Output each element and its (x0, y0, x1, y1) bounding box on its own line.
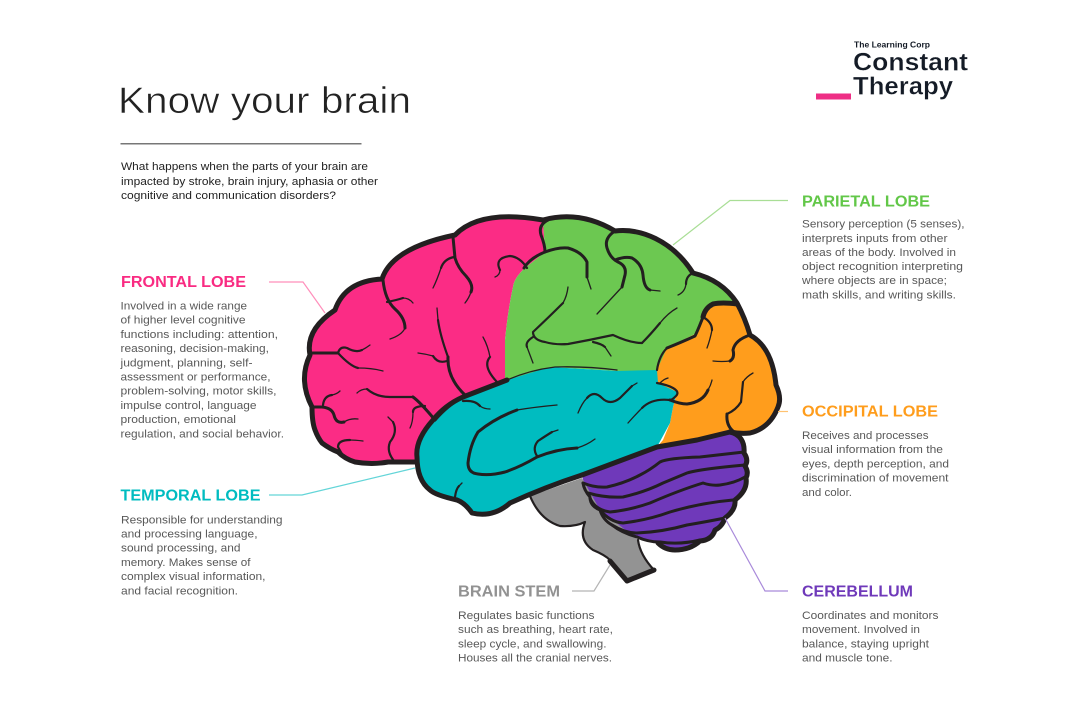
panel: parietal lobe: interprets inputs from other (802, 233, 948, 245)
panel: temporal lobe: memory. Makes sense of (121, 557, 251, 569)
brain outer outline (304, 217, 780, 464)
leader: parietal lobe (673, 200, 788, 245)
panel: brain stem: sleep cycle, and swallowing. (458, 638, 606, 650)
panel: cerebellum: movement. Involved in (802, 624, 920, 636)
panel: occipital lobe: visual information from the (802, 444, 943, 456)
panel: frontal lobe: production, emotional (120, 414, 236, 426)
panel: cerebellum: CEREBELLUM (802, 584, 913, 601)
cerebellum folds (583, 432, 747, 550)
brain illustration (304, 217, 780, 581)
panel: temporal lobe: Responsible for understanding (121, 514, 282, 526)
temporal lobe outline and folds (417, 367, 730, 514)
panel: brain stem: Regulates basic functions (458, 610, 595, 622)
panel: frontal lobe: FRONTAL LOBE (121, 274, 246, 291)
panel: brain stem: Houses all the cranial nerves. (458, 653, 612, 665)
panel: frontal lobe (119, 274, 284, 440)
panel: parietal lobe: PARIETAL LOBE (802, 193, 930, 210)
panel: frontal lobe: assessment or performance, (120, 372, 270, 384)
panel: temporal lobe: and facial recognition. (121, 585, 238, 597)
occipital lobe outline and folds (657, 303, 753, 431)
brain stem outline (530, 496, 654, 581)
panel: parietal lobe: object recognition interpreting (802, 261, 963, 273)
panel: frontal lobe: impulse control, language (120, 400, 256, 412)
panel: occipital lobe: eyes, depth perception, and (802, 458, 949, 470)
panel: temporal lobe (120, 487, 282, 597)
panel: occipital lobe (802, 403, 949, 499)
panel: parietal lobe: where objects are in space; (801, 275, 947, 287)
occipital lobe fill (657, 303, 780, 447)
panel: parietal lobe: areas of the body. Involved in (802, 247, 956, 259)
panel: frontal lobe: regulation, and social behavior. (120, 428, 284, 440)
panel: parietal lobe: math skills, and writing skills. (802, 289, 956, 301)
panel: occipital lobe: Receives and processes (802, 430, 929, 442)
panel: temporal lobe: TEMPORAL LOBE (120, 487, 260, 504)
leader: temporal lobe (269, 468, 415, 495)
panel: frontal lobe: problem-solving, motor skills, (120, 386, 276, 398)
panel: brain stem: BRAIN STEM (458, 584, 560, 601)
logo: Constant Therapy: Therapy (853, 72, 953, 100)
panel: occipital lobe: and color. (802, 487, 852, 499)
leader: occipital lobe (778, 410, 788, 412)
intro text: impacted by stroke, brain injury, aphasia or other (121, 176, 378, 188)
panel: occipital lobe: OCCIPITAL LOBE (802, 403, 938, 420)
panel: cerebellum: balance, staying upright (802, 638, 929, 650)
panel: temporal lobe: sound processing, and (121, 543, 240, 555)
frontal lobe fill (304, 217, 545, 462)
panel: frontal lobe: reasoning, decision-making, (120, 343, 269, 355)
panel: cerebellum: and muscle tone. (802, 653, 892, 665)
logo: Constant Therapy: Constant (853, 48, 969, 76)
temporal lobe fill (417, 367, 677, 514)
panel: cerebellum: Coordinates and monitors (802, 610, 939, 622)
panel: temporal lobe: complex visual information, (121, 571, 266, 583)
panel: occipital lobe: discrimination of movement (802, 473, 948, 485)
panel: frontal lobe: of higher level cognitive (120, 315, 246, 327)
logo: Constant Therapy: The Learning Corp (854, 40, 930, 50)
intro text: What happens when the parts of your brain are (121, 161, 368, 173)
frontal lobe folds (310, 237, 527, 462)
parietal lobe fill (505, 217, 737, 382)
logo: Constant Therapy (816, 40, 969, 100)
panel: brain stem: such as breathing, heart rate, (458, 624, 613, 636)
title: Know your brain (118, 80, 411, 121)
panel: parietal lobe (801, 193, 964, 301)
panel: parietal lobe: Sensory perception (5 senses), (802, 219, 964, 231)
panel: frontal lobe: functions including: attention, (120, 329, 278, 341)
panel: cerebellum (802, 584, 939, 665)
panel: frontal lobe: Involved in a wide range (120, 300, 247, 312)
cerebellum fill (582, 432, 747, 550)
leader: cerebellum (725, 518, 788, 591)
leader: frontal lobe (269, 282, 325, 313)
leader: brain stem (572, 565, 610, 591)
panel: temporal lobe: and processing language, (121, 528, 258, 540)
title rule (120, 143, 362, 144)
parietal lobe folds (524, 220, 693, 363)
panel: frontal lobe: judgment, planning, self- (119, 357, 253, 369)
intro text (121, 161, 378, 202)
panel: brain stem (458, 584, 613, 665)
intro text: cognitive and communication disorders? (121, 190, 336, 202)
brain stem fill (530, 478, 654, 581)
